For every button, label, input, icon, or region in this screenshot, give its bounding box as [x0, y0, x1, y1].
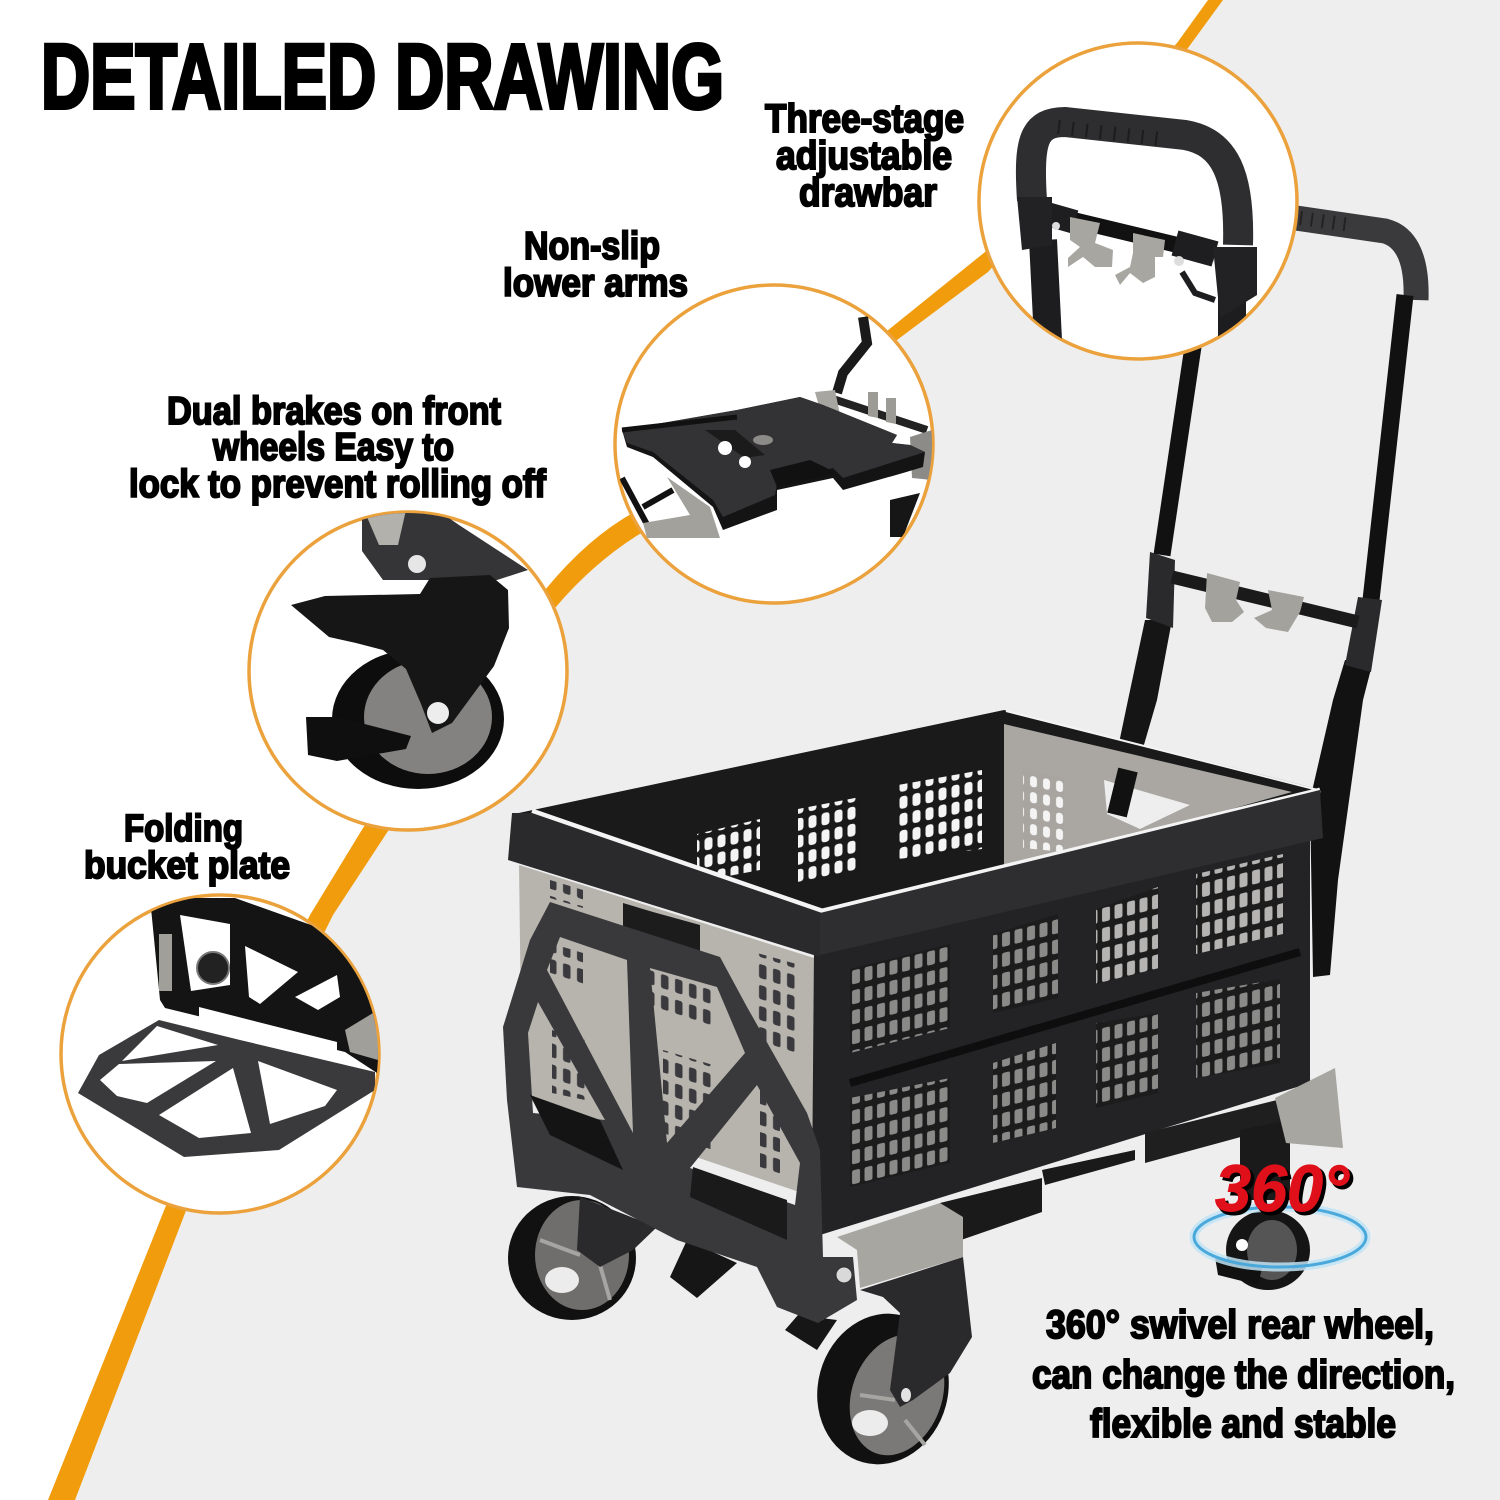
label: three-stage adjustable drawbar: Three-stage — [765, 97, 964, 141]
front right face of crate — [812, 830, 1310, 1235]
drawbar handle — [1017, 122, 1257, 340]
front brake pedals — [670, 1240, 837, 1350]
360 degree swirl badge: 360° — [1215, 1151, 1350, 1225]
360 degree swirl badge: 360° — [1218, 1154, 1353, 1228]
perforation on rear wall — [1023, 770, 1064, 852]
orange diagonal band — [48, 0, 1223, 1500]
rear-left wall panels — [697, 770, 982, 884]
base feet — [940, 1098, 1285, 1240]
label: 360 swivel rear wheel: 360° swivel rear wheel, — [1046, 1303, 1434, 1347]
front wheel — [801, 1257, 972, 1479]
label: folding bucket plate: Folding — [124, 808, 243, 850]
folding crate and cart — [503, 710, 1343, 1479]
white edge of rear rim — [1006, 711, 1318, 790]
label: 360 swivel rear wheel: flexible and stable — [1090, 1402, 1396, 1446]
circle: non-slip lower arms detail — [615, 285, 933, 603]
label: non-slip lower arms: Non-slip — [524, 225, 660, 268]
label: three-stage adjustable drawbar — [765, 97, 964, 215]
hinge bar — [850, 952, 1300, 1083]
left face perforations — [550, 880, 800, 1180]
label: 360 swivel rear wheel — [1032, 1303, 1455, 1446]
crate interior — [514, 710, 1322, 915]
label: dual brakes on front wheels: lock to prevent rolling off — [129, 463, 547, 506]
rear grey bracket — [1275, 1068, 1343, 1148]
front grey bracket — [836, 1203, 963, 1288]
label: non-slip lower arms — [503, 225, 688, 305]
label: dual brakes on front wheels: Dual brakes on front — [167, 390, 501, 433]
folded foot plate — [78, 898, 380, 1157]
label: 360 swivel rear wheel: can change the direction, — [1032, 1353, 1455, 1397]
label: dual brakes on front wheels: wheels Easy to — [212, 426, 454, 469]
label: dual brakes on front wheels — [129, 390, 547, 506]
window through rear wall — [1104, 770, 1190, 829]
360 degree swirl badge — [1194, 1151, 1366, 1267]
caster with brake — [291, 505, 528, 789]
folded platform — [622, 317, 932, 538]
perforated side panels — [850, 854, 1283, 1187]
telescopic handle of the cart — [1105, 218, 1416, 977]
side A-frame — [503, 902, 857, 1323]
left face of crate — [519, 865, 814, 1197]
label: three-stage adjustable drawbar: drawbar — [799, 171, 937, 215]
grey rear wall — [1004, 724, 1292, 872]
circle: folding bucket plate detail — [61, 895, 380, 1213]
label: folding bucket plate: bucket plate — [84, 845, 290, 887]
rear swivel wheel — [1215, 1120, 1310, 1290]
inner white lip — [532, 790, 1320, 911]
title: DETAILED DRAWING — [41, 26, 724, 128]
rear-left wheel — [508, 1196, 657, 1320]
circle: three-stage drawbar detail — [979, 43, 1297, 359]
label: folding bucket plate — [84, 808, 290, 887]
rim band — [508, 790, 1323, 957]
label: three-stage adjustable drawbar: adjustable — [776, 134, 952, 178]
label: non-slip lower arms: lower arms — [503, 262, 688, 305]
circle: dual brakes detail — [249, 505, 567, 830]
